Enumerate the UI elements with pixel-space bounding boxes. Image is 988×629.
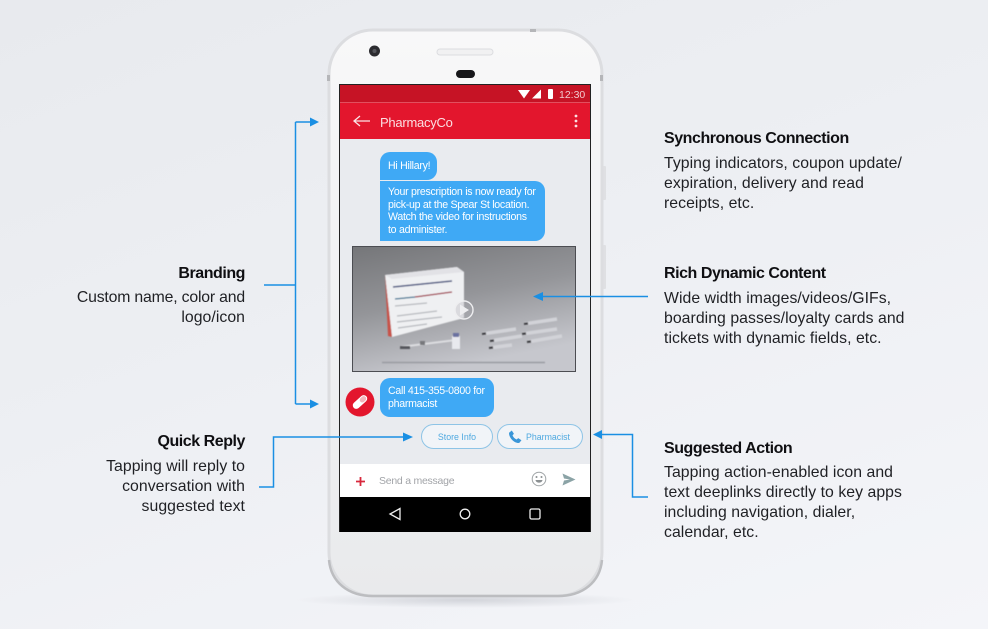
message bubble: call pharmacist: pharmacist	[388, 398, 437, 410]
back arrow	[353, 116, 370, 126]
phone screen	[339, 84, 591, 532]
text: suggested action: Suggested Action	[664, 440, 792, 457]
message bubble: call pharmacist	[380, 378, 494, 417]
menu dots	[574, 114, 578, 128]
text: synchronous connection: receipts, etc.	[664, 195, 754, 212]
text: rich dynamic content: tickets with dynamic fields, etc.	[664, 330, 882, 347]
status icons	[518, 89, 553, 99]
text: suggested action	[664, 440, 902, 541]
text: synchronous connection	[664, 130, 902, 212]
clock: 12:30	[559, 88, 585, 100]
plus icon	[356, 477, 365, 486]
text: suggested action: calendar, etc.	[664, 524, 759, 541]
text: suggested action: including navigation, dialer,	[664, 504, 855, 521]
arrow: branding bracket	[264, 118, 319, 408]
text: synchronous connection: expiration, delivery and read	[664, 175, 864, 192]
text: quick reply: Tapping will reply to	[106, 458, 245, 475]
message bubble: prescription: Your prescription is now ready for	[388, 186, 536, 198]
nav bar	[340, 497, 590, 533]
chip: pharmacist: Pharmacist	[526, 432, 570, 442]
text: branding: Custom name, color and	[77, 289, 245, 306]
text: quick reply: Quick Reply	[157, 433, 245, 450]
message bubble: prescription: Watch the video for instructions	[388, 211, 527, 223]
app bar	[340, 102, 590, 139]
arrow: quick reply	[259, 432, 413, 487]
message bubble: prescription: to administer.	[388, 224, 447, 236]
message bubble: greeting	[380, 152, 437, 180]
text: branding	[77, 265, 245, 326]
chip: store info	[421, 424, 493, 449]
message bubble: call pharmacist: Call 415-355-0800 for	[388, 385, 485, 397]
placeholder: Send a message	[379, 475, 454, 487]
text: rich dynamic content: Wide width images/videos/GIFs,	[664, 290, 891, 307]
emoji icon	[532, 472, 546, 486]
text: branding: logo/icon	[181, 309, 245, 326]
message bubble: prescription	[380, 181, 545, 241]
chip: store info: Store Info	[438, 432, 476, 442]
icon: phone	[509, 430, 522, 443]
arrow: rich content	[533, 292, 648, 301]
input bar	[340, 464, 590, 497]
text: suggested action: Tapping action-enabled icon and	[664, 464, 893, 481]
text: suggested action: text deeplinks directly to key apps	[664, 484, 902, 501]
text: quick reply	[106, 433, 246, 515]
text: quick reply: conversation with	[122, 478, 245, 495]
status bar	[340, 85, 590, 102]
text: synchronous connection: Synchronous Connection	[664, 130, 849, 147]
arrow: suggested action	[593, 430, 648, 497]
text: rich dynamic content: boarding passes/loyalty cards and	[664, 310, 905, 327]
sender name: PharmacyCo	[380, 115, 453, 130]
chip: pharmacist	[497, 424, 583, 449]
text: synchronous connection: Typing indicators, coupon update/	[664, 155, 902, 172]
message bubble: greeting: Hi Hillary!	[388, 160, 430, 172]
send icon	[562, 474, 576, 486]
nav buttons	[388, 507, 541, 521]
video message	[352, 246, 576, 372]
text: rich dynamic content: Rich Dynamic Content	[664, 265, 826, 282]
text: rich dynamic content	[664, 265, 905, 347]
message bubble: prescription: pick-up at the Spear St location.	[388, 199, 529, 211]
icon: pill avatar	[346, 388, 374, 416]
text: branding: Branding	[178, 265, 245, 282]
text: quick reply: suggested text	[142, 498, 245, 515]
